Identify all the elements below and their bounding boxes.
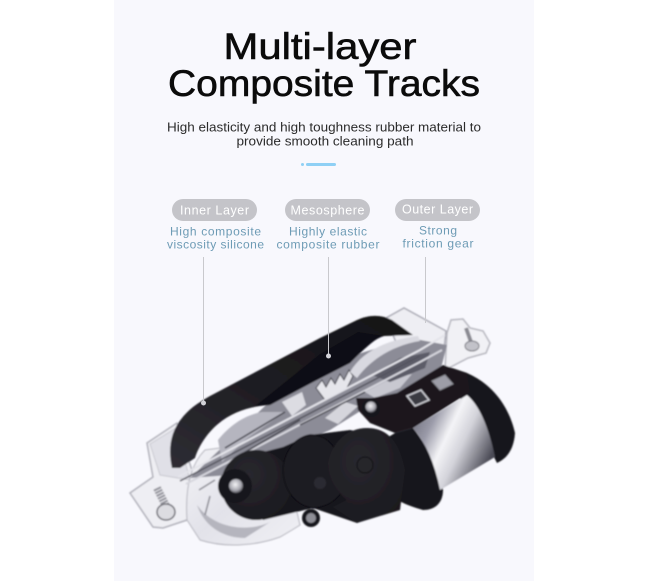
label: outer layer: Strong (419, 224, 457, 238)
transparent housing, rear (386, 308, 446, 352)
label: mesosphere: Mesosphere (290, 204, 365, 218)
gear disc, right with block (328, 428, 405, 523)
leader line: mesosphere (326, 257, 331, 358)
clear wheel, right (350, 336, 420, 378)
screw, bottom (302, 509, 320, 527)
centre pin (314, 477, 326, 489)
label: mesosphere (276, 199, 380, 252)
label: inner layer: viscosity silicone (167, 238, 264, 252)
motor bracket (356, 365, 470, 433)
label: inner layer (167, 199, 264, 252)
centre transparent section with gears (190, 338, 447, 478)
label: outer layer: Outer Layer (402, 202, 473, 216)
label: inner layer: High composite (170, 224, 261, 238)
leader line: outer layer (425, 257, 426, 323)
label: outer layer (395, 199, 480, 250)
front flange (130, 423, 195, 528)
accent divider (301, 163, 336, 166)
rear flange (445, 319, 490, 370)
subtitle: provide smooth cleaning path (236, 134, 414, 148)
metal motor cylinder (413, 395, 495, 490)
label: mesosphere: composite rubber (276, 238, 380, 252)
subtitle: High elasticity and high toughness rubber material to (167, 120, 481, 134)
front flange screw (157, 488, 175, 520)
gear disc, left (221, 450, 291, 520)
label: inner layer: Inner Layer (180, 204, 249, 218)
rear ring of motor (443, 365, 515, 463)
black track belt (170, 316, 413, 468)
rear flange screw (465, 328, 479, 351)
illustration: track module (130, 308, 515, 545)
motor window, right (432, 375, 453, 390)
leader line: inner layer (201, 257, 206, 406)
subtitle (167, 120, 481, 148)
right disc boss (357, 457, 373, 473)
housing rails (178, 335, 445, 477)
dark backing joining the discs (240, 430, 400, 523)
motor front cap (375, 428, 443, 510)
background panel (114, 0, 534, 581)
label: outer layer: friction gear (402, 236, 474, 250)
clear wheel, lower housing (187, 440, 300, 545)
title: Multi-layer (224, 26, 416, 67)
title: Composite Tracks (168, 63, 480, 104)
motor window, left (407, 390, 429, 406)
label: mesosphere: Highly elastic (289, 224, 367, 238)
screw, left disc (218, 469, 252, 503)
screw, motor bracket (362, 399, 380, 417)
title (168, 26, 480, 104)
inner belt shadow (255, 332, 384, 406)
gear disc, centre (283, 435, 345, 508)
gears (316, 370, 353, 400)
